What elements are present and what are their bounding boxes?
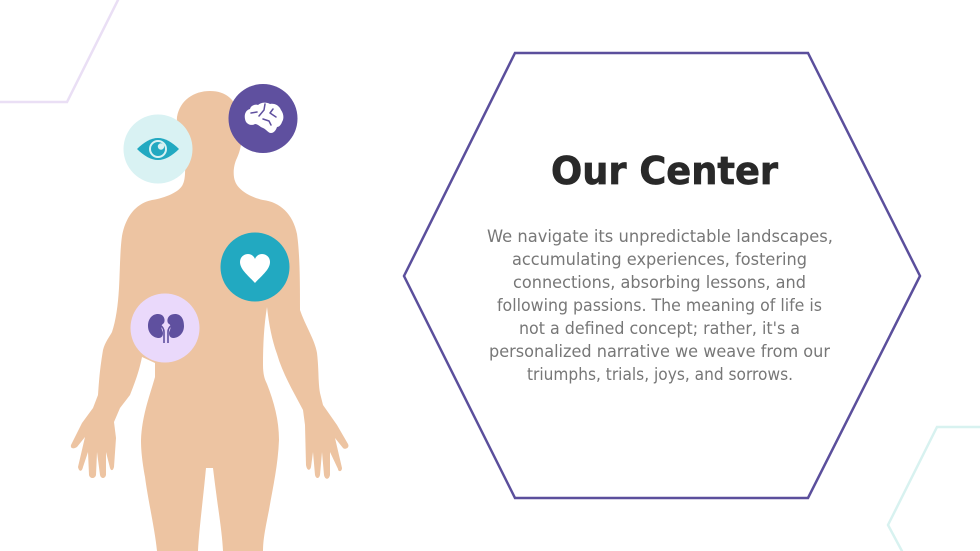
body text: personalized narrative we weave from our (489, 342, 830, 362)
body text: accumulating experiences, fostering (512, 250, 807, 270)
icon: eye (124, 114, 192, 184)
human body silhouette (71, 91, 348, 551)
icon: brain (228, 84, 298, 153)
body text: connections, absorbing lessons, and (513, 273, 806, 293)
body text: not a defined concept; rather, it's a (519, 319, 800, 339)
body text (487, 227, 833, 385)
icon: heart (220, 232, 290, 302)
body text: following passions. The meaning of life is (497, 296, 822, 316)
icon: kidneys (130, 294, 200, 362)
body text: triumphs, trials, joys, and sorrows. (527, 365, 793, 385)
hexagon panel (404, 53, 920, 498)
body text: We navigate its unpredictable landscapes, (487, 227, 833, 247)
title: Our Center (551, 149, 778, 193)
